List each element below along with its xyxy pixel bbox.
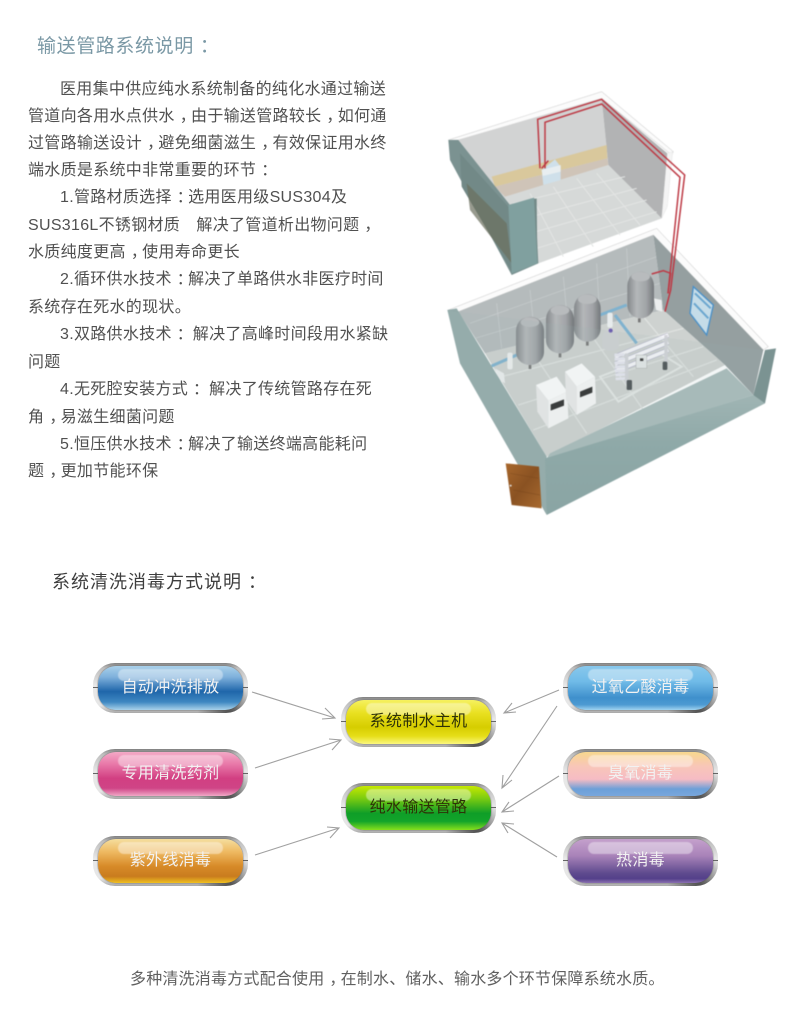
text block: piping description: 角 ，易滋生细菌问题: [28, 409, 175, 426]
text block: piping description: 1.管路材质选择 ：选用医用级SUS304及: [60, 189, 347, 206]
button: cleaning agent: [93, 749, 248, 799]
text block: piping description: 系统存在死水的现状。: [28, 299, 191, 316]
button: water host: [341, 697, 496, 747]
button: ultraviolet: [93, 836, 248, 886]
text block: piping description: 题 ，更加节能环保: [28, 463, 158, 480]
poster: [690, 287, 713, 335]
arrow: peracetic acid to host: [504, 690, 559, 713]
text block: piping description: SUS316L不锈钢材质 解决了管道析出物问题 ，: [28, 217, 381, 234]
arrow: ozone to pipeline: [502, 776, 559, 812]
button: peracetic acid: [563, 663, 718, 713]
arrow: peracetic acid to pipeline: [502, 706, 557, 788]
button: ultraviolet: 紫外线消毒: [130, 852, 211, 869]
button: water host: 系统制水主机: [370, 713, 467, 730]
illustration: two-floor piping cutaway: [446, 91, 776, 516]
upper room: [448, 92, 673, 275]
button: ozone: [563, 749, 718, 799]
button: auto flush: [93, 663, 248, 713]
button: heat: [563, 836, 718, 886]
door: [506, 463, 542, 508]
button: peracetic acid: 过氧乙酸消毒: [592, 679, 689, 696]
text block: piping description: 问题: [28, 354, 61, 371]
text block: piping description: 医用集中供应纯水系统制备的纯化水通过输送: [60, 81, 386, 98]
red water pipes: [538, 99, 685, 312]
text block: piping description: 2.循环供水技术 ：解决了单路供水非医疗时间: [60, 271, 384, 288]
storage tanks: [516, 272, 654, 369]
control cabinets: [536, 363, 596, 428]
glass walls: [447, 308, 776, 515]
arrow: auto flush to host: [252, 692, 335, 719]
text block: piping description: 3.双路供水技术 ： 解决了高峰时间段用水紧缺: [60, 326, 388, 343]
lower room: [447, 99, 776, 515]
arrow: UV to pipeline: [255, 827, 339, 855]
title: delivery piping system: 输送管路系统说明 ：: [37, 36, 219, 57]
arrow: cleaning agent to host: [255, 739, 341, 768]
small white parts: [495, 298, 662, 383]
pipes on floor: [492, 305, 637, 366]
footer note: 多种清洗消毒方式配合使用 ，在制水、储水、输水多个环节保障系统水质。: [130, 971, 665, 988]
button: pure water pipeline: [341, 783, 496, 833]
text block: piping description: 水质纯度更高 ，使用寿命更长: [28, 244, 240, 261]
button: ozone: 臭氧消毒: [608, 765, 673, 782]
text block: piping description: 过管路输送设计 ，避免细菌滋生 ，有效保证用水终: [28, 135, 387, 152]
button: pure water pipeline: 纯水输送管路: [370, 799, 467, 816]
text block: piping description: [28, 80, 388, 480]
button: auto flush: 自动冲洗排放: [122, 679, 219, 696]
button: cleaning agent: 专用清洗药剂: [122, 765, 219, 782]
arrow: heat to pipeline: [502, 823, 557, 857]
section heading: cleaning and disinfection: 系统清洗消毒方式说明 ：: [52, 572, 267, 592]
arrows: [252, 690, 560, 858]
text block: piping description: 4.无死腔安装方式 ： 解决了传统管路存在死: [60, 381, 372, 398]
button: heat: 热消毒: [616, 852, 665, 869]
text block: piping description: 管道向各用水点供水 ，由于输送管路较长 ，如何通: [28, 108, 387, 125]
RO rack: [600, 335, 682, 402]
text block: piping description: 5.恒压供水技术 ：解决了输送终端高能耗问: [60, 436, 367, 453]
text block: piping description: 端水质是系统中非常重要的环节 ：: [28, 162, 278, 179]
